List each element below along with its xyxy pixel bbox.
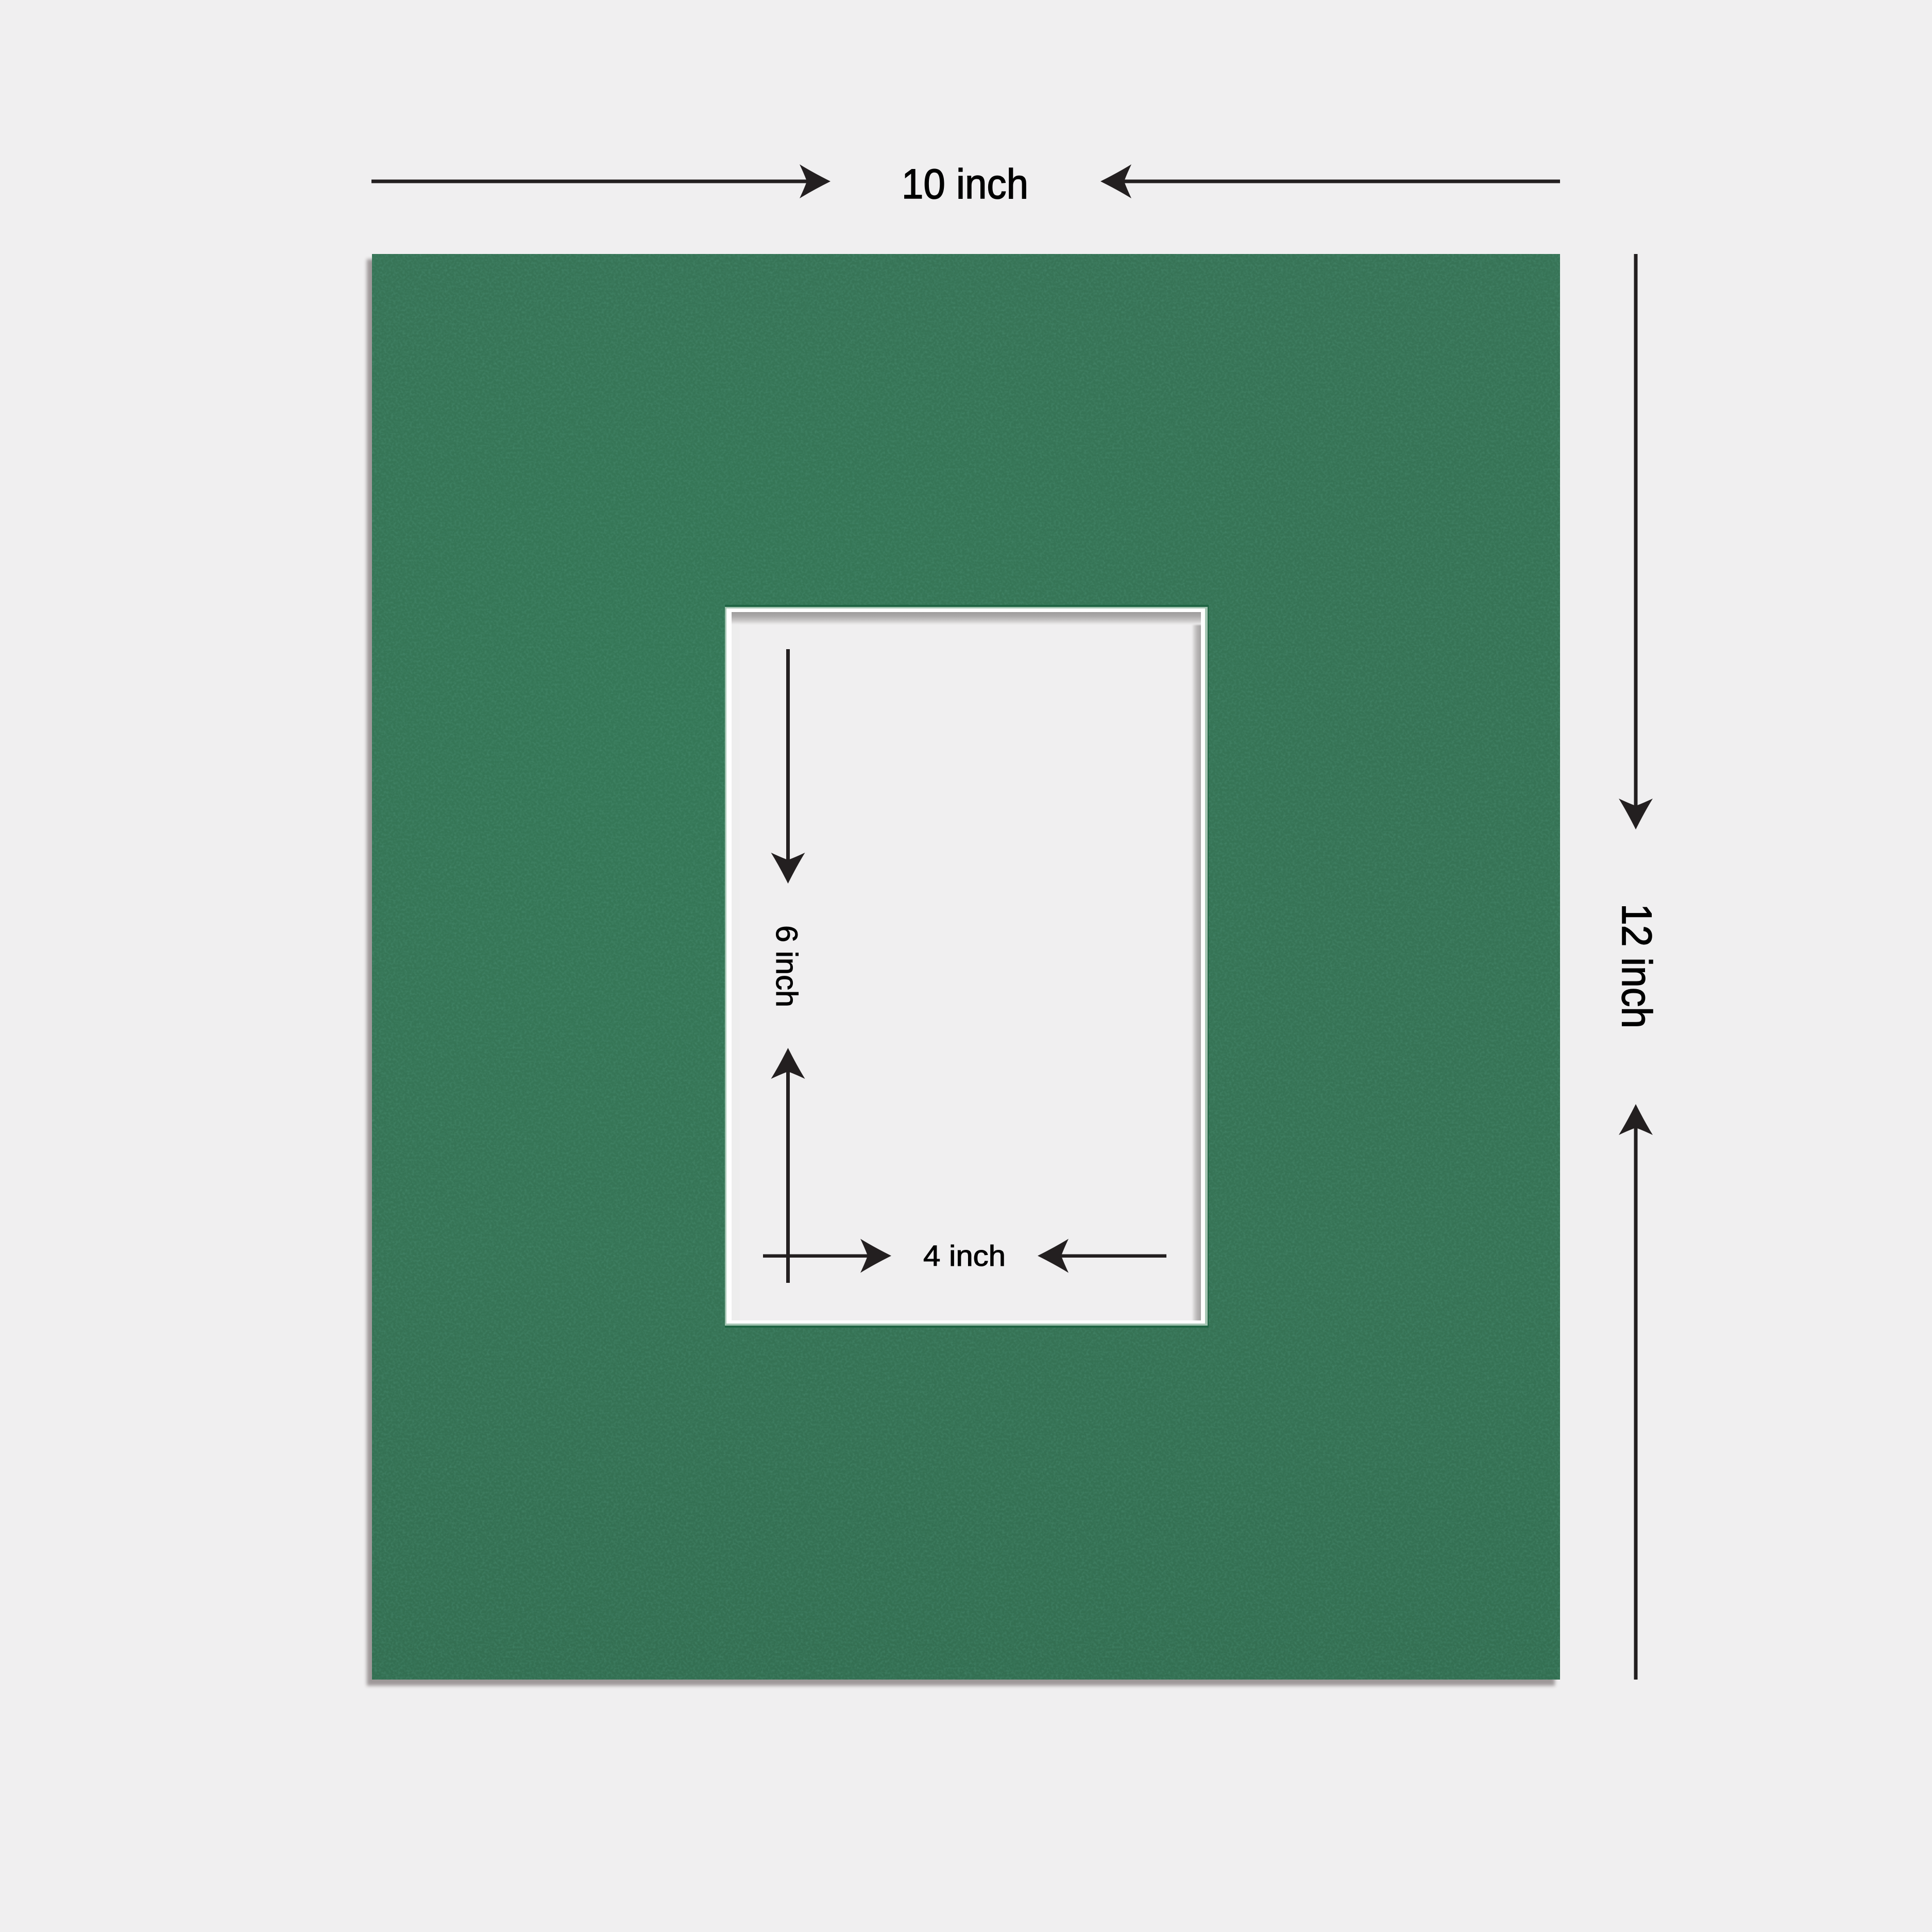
arrow: window height upper, pointing down	[771, 649, 805, 884]
right inner shadow	[1191, 612, 1201, 1320]
white bevel core	[726, 608, 1205, 1324]
label: 12 inch height: 12 inch	[1613, 904, 1660, 1028]
arrow: right side upper, pointing down	[1619, 254, 1653, 829]
arrow: right side lower, pointing up	[1619, 1104, 1653, 1680]
bevel light edge	[725, 607, 1208, 1326]
arrow: window width left, pointing right	[763, 1239, 891, 1273]
panel: window opening	[725, 605, 1209, 1328]
bevel dark edge	[725, 605, 1209, 1328]
mat paper grain	[372, 254, 1560, 1680]
arrow: top right, pointing left	[1100, 164, 1560, 198]
arrow: top left, pointing right	[371, 164, 831, 198]
mat surface	[372, 254, 1560, 1680]
label: 6 inch height: 6 inch	[770, 925, 803, 1007]
top inner shadow	[732, 612, 1201, 626]
panel: green mat board	[367, 254, 1560, 1686]
arrow: window width right, pointing left	[1038, 1239, 1166, 1273]
label: 4 inch width: 4 inch	[923, 1240, 1006, 1273]
label: 10 inch width: 10 inch	[902, 161, 1028, 208]
left interior tint	[732, 612, 740, 1320]
mat drop shadow	[367, 259, 1555, 1686]
arrow: window height lower, pointing up	[771, 1048, 805, 1283]
mat tonal variation	[372, 254, 1560, 1680]
mat vertical shading	[372, 254, 1560, 1680]
window interior	[732, 612, 1201, 1320]
